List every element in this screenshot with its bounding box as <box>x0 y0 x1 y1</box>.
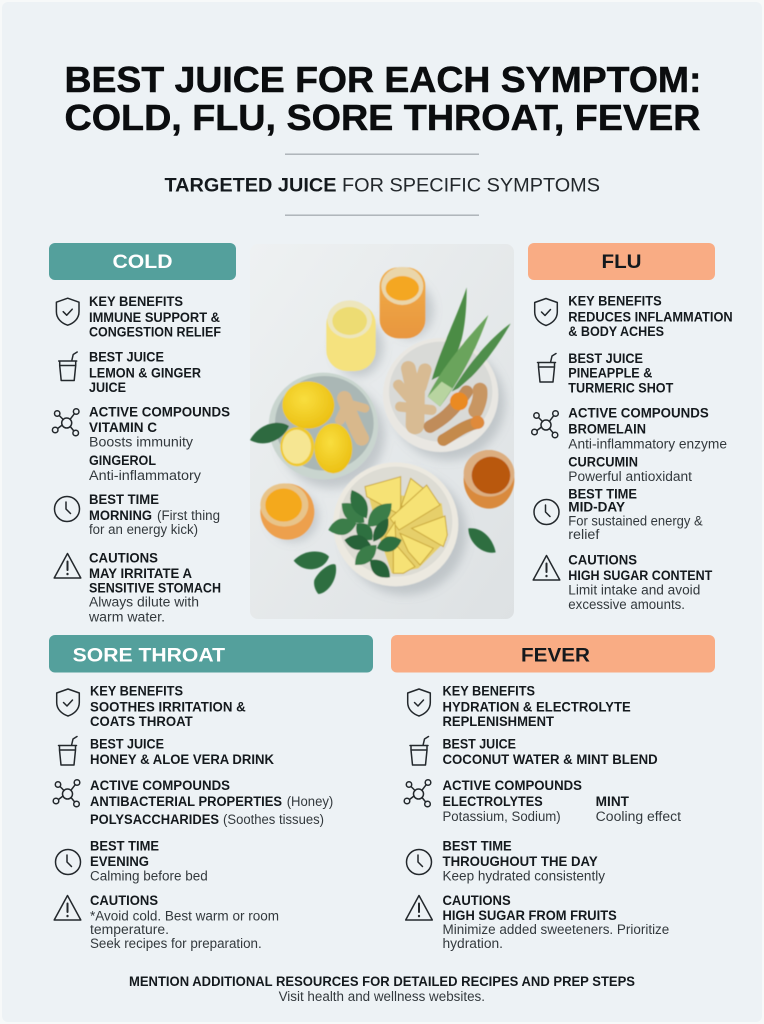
active compounds: ANTIBACTERIAL PROPERTIES <box>90 794 282 809</box>
icon: warning <box>533 556 560 580</box>
best time: BEST TIME <box>442 839 512 854</box>
cautions: CAUTIONS <box>90 893 158 908</box>
heading: fever: FEVER <box>521 646 590 667</box>
heading: cold <box>49 243 236 280</box>
title: BEST JUICE FOR EACH SYMPTOM: <box>64 59 702 100</box>
key benefits: SOOTHES IRRITATION & <box>90 700 246 715</box>
cautions: CAUTIONS <box>568 552 637 567</box>
title: COLD, FLU, SORE THROAT, FEVER <box>64 97 700 138</box>
active compounds: GINGEROL <box>89 453 156 468</box>
cautions: Always dilute with <box>89 595 199 610</box>
bowl: ginger, aloe and turmeric <box>383 287 511 452</box>
panel: sore throat <box>49 635 373 951</box>
cautions: Seek recipes for preparation. <box>90 936 262 951</box>
icon: cup <box>58 736 77 765</box>
best juice: COCONUT WATER & MINT BLEND <box>442 752 658 767</box>
active compounds: Anti-inflammatory <box>89 468 201 483</box>
best time: Calming before bed <box>90 869 208 884</box>
active compounds <box>568 406 727 484</box>
icon: cup <box>59 352 77 380</box>
heading: fever <box>391 635 715 672</box>
cautions: excessive amounts. <box>568 597 685 612</box>
best time <box>89 492 220 537</box>
jar: mango juice <box>260 483 314 540</box>
best time: THROUGHOUT THE DAY <box>442 854 598 869</box>
key benefits: COATS THROAT <box>90 714 193 729</box>
active compounds: Potassium, Sodium) <box>442 809 561 824</box>
cautions: HIGH SUGAR FROM FRUITS <box>442 908 617 923</box>
best time: Keep hydrated consistently <box>442 869 605 884</box>
active compounds: ACTIVE COMPOUNDS <box>89 405 230 420</box>
key benefits <box>89 294 221 340</box>
key benefits: REPLENISHMENT <box>442 714 555 729</box>
active compounds: Boosts immunity <box>89 435 193 450</box>
cautions <box>90 893 279 951</box>
icon: clock <box>54 496 80 522</box>
icon: warning <box>54 554 81 578</box>
key benefits: REDUCES INFLAMMATION <box>568 310 733 325</box>
subtitle <box>164 176 600 196</box>
jar: honey <box>464 450 514 509</box>
icon: warning <box>406 896 432 920</box>
photo: juice ingredients <box>250 244 514 619</box>
bowl: pineapple and mint <box>328 462 458 586</box>
icon: cup <box>410 736 428 765</box>
cautions: CAUTIONS <box>89 551 158 566</box>
best juice: BEST JUICE <box>89 350 164 365</box>
key benefits: CONGESTION RELIEF <box>89 324 221 340</box>
active compounds <box>442 778 681 824</box>
key benefits: KEY BENEFITS <box>90 684 183 699</box>
cautions: SENSITIVE STOMACH <box>89 581 221 596</box>
bowl: lemons and ginger <box>250 373 378 479</box>
key benefits: KEY BENEFITS <box>568 294 662 309</box>
cautions: hydration. <box>442 936 503 951</box>
jar: lemon juice <box>326 300 376 371</box>
best time: relief <box>568 527 600 542</box>
best time: for an energy kick) <box>89 522 198 537</box>
active compounds: Anti-inflammatory enzyme <box>568 436 727 451</box>
cautions: warm water. <box>88 610 165 625</box>
best juice: PINEAPPLE & <box>568 366 653 381</box>
cautions: Minimize added sweeteners. Prioritize <box>442 922 669 937</box>
best juice <box>568 351 674 395</box>
panel: fever <box>391 635 715 951</box>
cautions: HIGH SUGAR CONTENT <box>568 568 713 583</box>
panel: cold <box>49 243 236 625</box>
key benefits: KEY BENEFITS <box>442 684 535 699</box>
best time: EVENING <box>90 854 149 869</box>
active compounds: Powerful antioxidant <box>568 469 692 484</box>
footer note <box>129 974 635 1004</box>
loose mint leaves <box>294 528 496 594</box>
active compounds: Cooling effect <box>596 809 681 824</box>
footer note: MENTION ADDITIONAL RESOURCES FOR DETAILED RECIPES AND PREP STEPS <box>129 974 635 989</box>
active compounds: ELECTROLYTES <box>442 794 543 809</box>
icon: shield <box>535 298 557 326</box>
active compounds: CURCUMIN <box>568 454 638 469</box>
active compounds: ACTIVE COMPOUNDS <box>442 778 582 793</box>
best time: BEST TIME <box>89 492 159 507</box>
best time: MORNING <box>89 508 152 523</box>
best time: BEST TIME <box>568 486 637 501</box>
active compounds: MINT <box>596 794 630 809</box>
active compounds: (Honey) <box>287 794 333 809</box>
best time: BEST TIME <box>90 839 159 854</box>
panel: flu <box>528 243 733 612</box>
active compounds <box>90 778 333 827</box>
active compounds: ACTIVE COMPOUNDS <box>90 778 230 793</box>
best time: MID-DAY <box>568 500 625 515</box>
icon: shield <box>408 689 430 716</box>
subtitle: FOR SPECIFIC SYMPTOMS <box>342 176 600 196</box>
heading: cold: COLD <box>112 252 172 273</box>
active compounds: ACTIVE COMPOUNDS <box>568 406 709 421</box>
icon: warning <box>54 896 81 920</box>
cautions <box>442 893 669 951</box>
heading: flu: FLU <box>602 252 642 273</box>
best time: (First thing <box>157 508 220 523</box>
key benefits: & BODY ACHES <box>568 324 664 339</box>
best juice: BEST JUICE <box>442 737 516 752</box>
icon: shield <box>56 298 79 325</box>
icon: molecule <box>404 780 431 807</box>
cautions: MAY IRRITATE A <box>89 566 192 581</box>
active compounds: (Soothes tissues) <box>223 812 324 827</box>
best juice: BEST JUICE <box>90 737 164 752</box>
best juice: HONEY & ALOE VERA DRINK <box>90 752 274 767</box>
cautions: Limit intake and avoid <box>568 582 700 597</box>
key benefits: HYDRATION & ELECTROLYTE <box>442 700 631 715</box>
icon: clock <box>56 850 80 874</box>
key benefits <box>568 294 733 339</box>
subtitle: TARGETED JUICE <box>164 176 336 196</box>
heading: flu <box>528 243 715 280</box>
best time <box>568 486 703 542</box>
best juice <box>442 737 658 767</box>
best time: For sustained energy & <box>568 514 703 529</box>
cautions: CAUTIONS <box>442 893 511 908</box>
best time <box>90 839 208 884</box>
title <box>64 59 702 138</box>
heading: sore throat: SORE THROAT <box>73 646 225 667</box>
heading: sore throat <box>49 635 373 672</box>
icon: cup <box>538 354 556 382</box>
cautions: *Avoid cold. Best warm or room <box>90 909 279 924</box>
active compounds: BROMELAIN <box>568 421 646 436</box>
shadows <box>268 282 505 595</box>
active compounds <box>89 405 230 483</box>
best juice: TURMERIC SHOT <box>568 380 674 395</box>
icon: molecule <box>53 780 80 807</box>
jar: orange juice <box>380 267 425 338</box>
icon: clock <box>406 850 432 874</box>
best juice: LEMON & GINGER <box>89 366 201 381</box>
cautions <box>568 552 713 612</box>
key benefits: IMMUNE SUPPORT & <box>89 310 220 325</box>
icon: molecule <box>52 409 79 436</box>
cautions: temperature. <box>90 922 169 937</box>
key benefits <box>442 684 631 729</box>
key benefits <box>90 684 246 729</box>
key benefits: KEY BENEFITS <box>89 294 183 309</box>
best juice: BEST JUICE <box>568 351 643 366</box>
best juice <box>90 737 274 767</box>
cautions <box>88 551 221 625</box>
icon: molecule <box>532 411 558 438</box>
icon: clock <box>534 500 559 524</box>
icon: shield <box>57 689 79 716</box>
best juice <box>89 350 201 395</box>
active compounds: POLYSACCHARIDES <box>90 812 219 827</box>
footer note: Visit health and wellness websites. <box>279 989 485 1004</box>
active compounds: VITAMIN C <box>89 420 157 435</box>
best juice: JUICE <box>89 380 126 395</box>
best time <box>442 839 605 884</box>
